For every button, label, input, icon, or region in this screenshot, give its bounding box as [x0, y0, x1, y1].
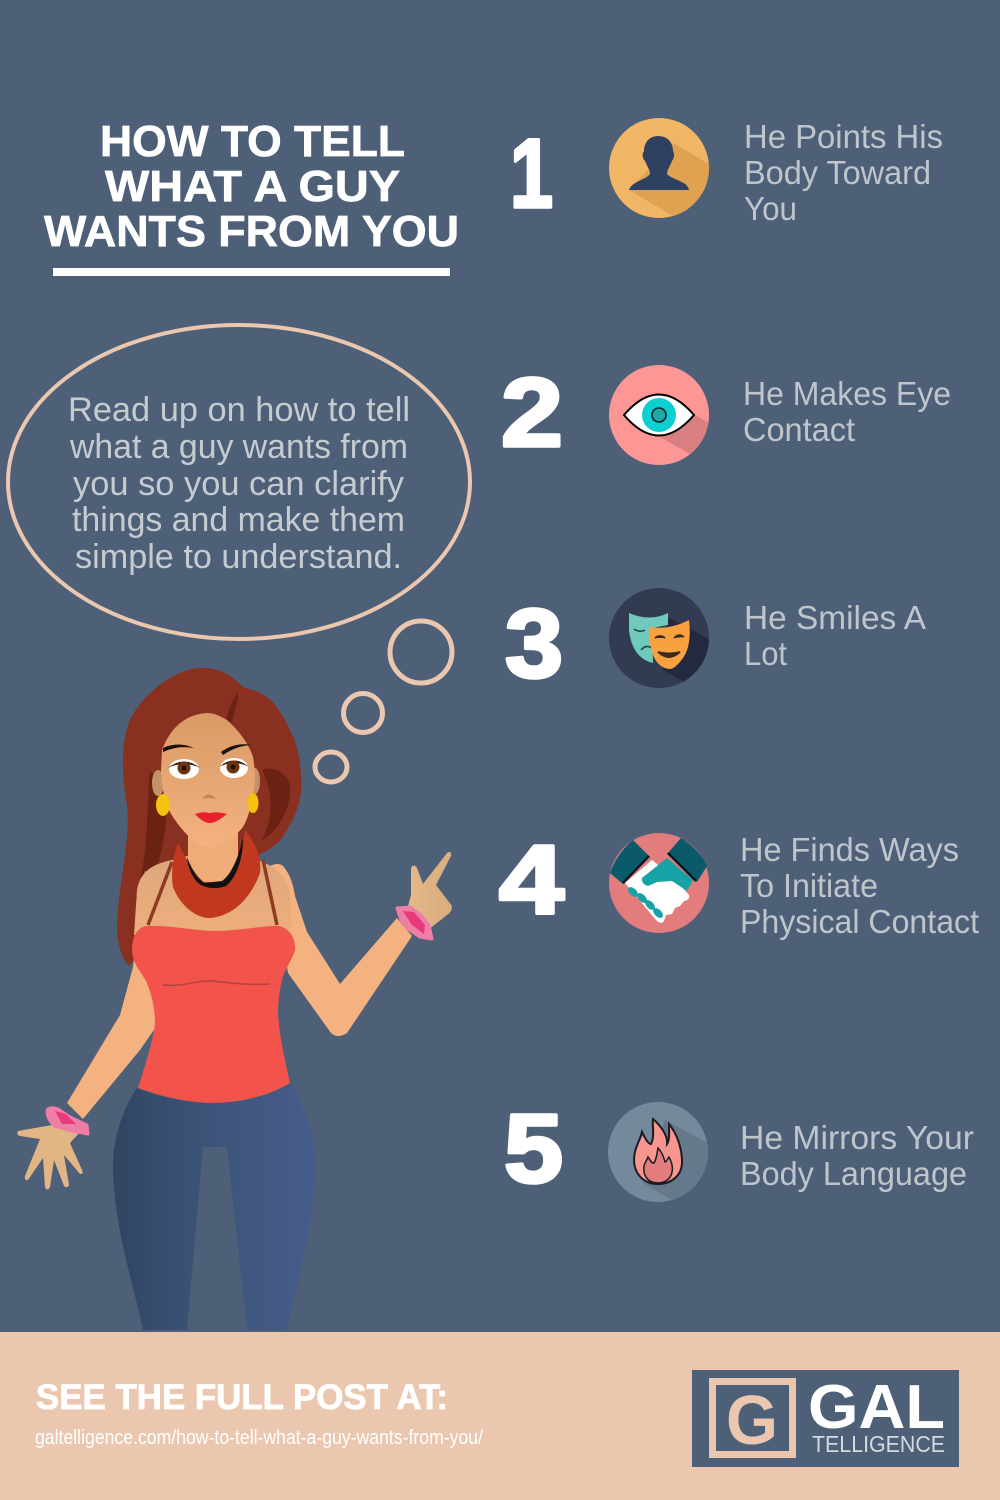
long shadow — [663, 617, 709, 682]
footer url: galtelligence.com/how-to-tell-what-a-guy-wants-from-you/ — [35, 1427, 483, 1449]
nose — [202, 794, 216, 799]
logo TELLIGENCE: TELLIGENCE — [812, 1431, 945, 1457]
number 2: 2 — [501, 358, 563, 467]
right eye — [219, 758, 249, 778]
icon: person — [609, 118, 709, 218]
step 1 text — [744, 118, 943, 227]
face — [161, 713, 255, 847]
left hand — [17, 1108, 88, 1190]
logo GAL: GAL — [808, 1373, 945, 1442]
large thought circle — [390, 621, 452, 683]
logo — [692, 1370, 959, 1467]
step 4 text — [740, 831, 979, 940]
back hair — [117, 668, 301, 966]
step 5 text: Body Language — [740, 1155, 967, 1192]
left cuff — [610, 840, 650, 884]
bubble outline — [8, 325, 470, 639]
icon: handshake — [609, 833, 709, 933]
eyebrows — [163, 744, 251, 755]
bubble text: simple to understand. — [75, 538, 402, 576]
bubble text: things and make them — [72, 501, 405, 539]
scarf — [172, 830, 260, 918]
flame outer — [634, 1119, 682, 1184]
jeans — [113, 1083, 315, 1330]
title: HOW TO TELL — [100, 117, 405, 166]
long shadow — [643, 1120, 708, 1200]
step 5 text: He Mirrors Your — [740, 1119, 974, 1156]
right hand — [397, 852, 452, 939]
title underline — [53, 268, 450, 276]
step 4 text: To Initiate — [740, 867, 878, 904]
step 4 text: He Finds Ways — [740, 831, 959, 868]
top seam — [163, 981, 270, 985]
icon: eye — [609, 365, 709, 465]
title — [44, 117, 459, 256]
bubble text: what a guy wants from — [69, 428, 408, 466]
right ear — [250, 768, 260, 794]
step 2 text — [743, 375, 951, 448]
step 3 text — [744, 599, 926, 672]
small thought circle — [315, 752, 347, 782]
pupil — [652, 408, 666, 422]
flame inner — [644, 1148, 672, 1183]
title: WANTS FROM YOU — [44, 207, 459, 256]
happy mask — [649, 620, 690, 669]
thought bubble — [8, 325, 470, 782]
left arm — [67, 870, 160, 1119]
left earring — [156, 794, 170, 816]
lips — [195, 812, 227, 823]
step 1 text: He Points His — [744, 118, 943, 155]
medium thought circle — [344, 694, 382, 732]
sad mask — [629, 613, 668, 663]
step 5 text — [740, 1119, 974, 1192]
right earring — [248, 793, 258, 813]
left ear — [152, 770, 164, 796]
white hand — [625, 860, 689, 923]
right arm — [270, 864, 412, 1036]
bubble text: Read up on how to tell — [68, 391, 410, 429]
footer band — [0, 1332, 1000, 1500]
icon: flame — [608, 1102, 708, 1202]
step 2 text: He Makes Eye — [743, 375, 951, 412]
number 3: 3 — [505, 589, 563, 698]
step 2 text: Contact — [743, 411, 855, 448]
halter straps — [148, 860, 277, 925]
left eye — [168, 759, 200, 779]
scarf shadow — [187, 838, 243, 888]
long shadow — [630, 143, 709, 216]
teal fingers — [626, 885, 665, 920]
logo G box — [712, 1382, 792, 1454]
step 1 text: You — [744, 190, 797, 227]
number 5: 5 — [504, 1094, 563, 1203]
bubble text — [68, 391, 410, 576]
dark hair strands — [135, 693, 290, 900]
iris — [642, 398, 676, 432]
right scrunchie — [397, 907, 432, 939]
left scrunchie — [47, 1108, 88, 1134]
footer heading: SEE THE FULL POST AT: — [36, 1378, 448, 1417]
number 1: 1 — [510, 119, 553, 228]
eye white — [624, 394, 694, 436]
neck — [188, 825, 238, 885]
logo G: G — [726, 1381, 778, 1459]
bubble text: you so you can clarify — [73, 465, 404, 503]
title: WHAT A GUY — [105, 162, 400, 211]
long shadow — [660, 415, 708, 454]
red top — [132, 926, 295, 1103]
step 3 text: He Smiles A — [744, 599, 926, 636]
teal hand — [642, 858, 693, 891]
happy mask face — [655, 635, 684, 657]
step 4 text: Physical Contact — [740, 903, 979, 940]
right cuff — [667, 838, 707, 882]
number 4: 4 — [499, 825, 564, 934]
woman illustration — [17, 668, 452, 1330]
cuff edges — [623, 853, 696, 883]
step 1 text: Body Toward — [744, 154, 931, 191]
step 3 text: Lot — [744, 635, 787, 672]
person silhouette — [629, 136, 689, 190]
icon: theatre masks — [609, 588, 709, 688]
chest and shoulders — [134, 850, 292, 935]
sad mask face — [634, 629, 652, 650]
